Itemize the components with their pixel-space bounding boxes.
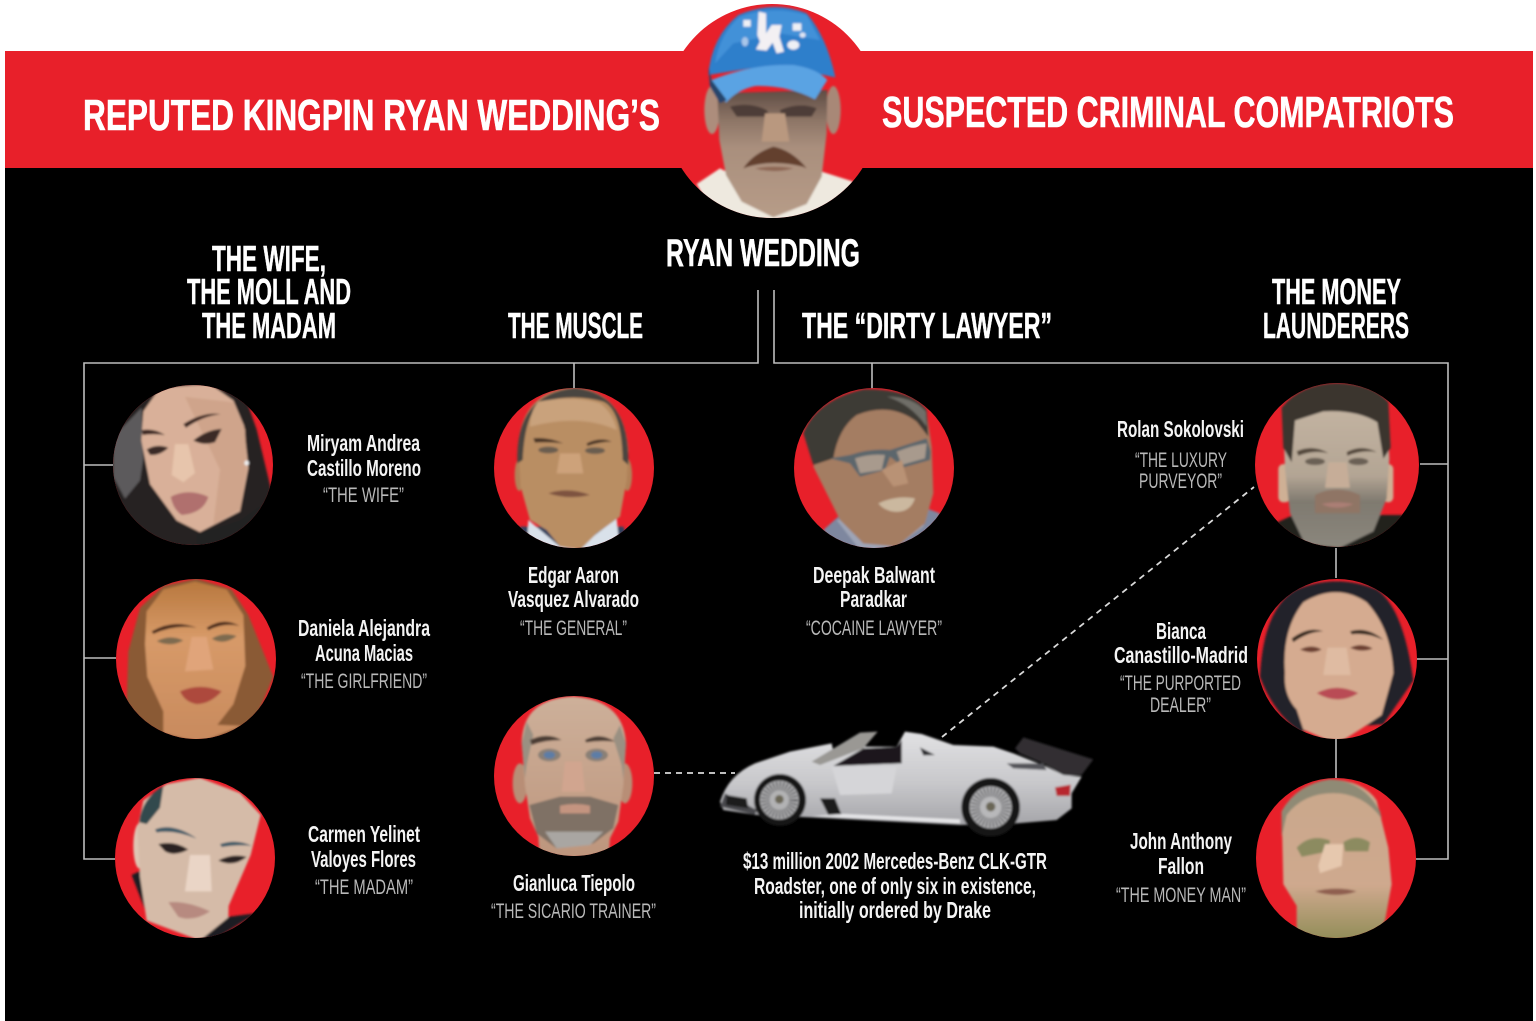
label: Bianca Canastillo-Madrid: Canastillo-Madrid <box>1114 642 1248 668</box>
caption: car description <box>743 848 1047 923</box>
label: John Anthony Fallon: “THE MONEY MAN” <box>1116 884 1246 907</box>
portrait: Deepak Balwant Paradkar <box>794 388 954 553</box>
caption: car description: Roadster, one of only six in existence, <box>754 873 1036 899</box>
label: Edgar Aaron Vasquez Alvarado <box>508 562 639 640</box>
label: Bianca Canastillo-Madrid: DEALER” <box>1150 694 1211 717</box>
label: Deepak Balwant Paradkar: “COCAINE LAWYER” <box>806 617 942 640</box>
label: Miryam Andrea Castillo Moreno <box>307 430 421 507</box>
portrait: Ryan Wedding <box>697 7 853 227</box>
heading: the wife, the moll and the madam: THE WIFE, <box>212 238 326 279</box>
dashed connector: Gianluca Tiepolo to car <box>654 772 735 774</box>
label: Rolan Sokolovski: “THE LUXURY <box>1135 449 1227 472</box>
label: Rolan Sokolovski: Rolan Sokolovski <box>1117 416 1244 442</box>
label: Rolan Sokolovski: PURVEYOR” <box>1139 470 1222 493</box>
portrait: Edgar Aaron Vasquez Alvarado <box>494 387 654 560</box>
label: Carmen Yelinet Valoyes Flores: “THE MADAM” <box>315 876 413 899</box>
portrait: Gianluca Tiepolo <box>494 696 654 862</box>
heading: the wife, the moll and the madam <box>187 238 351 346</box>
label: John Anthony Fallon: John Anthony <box>1130 828 1232 854</box>
portrait: Miryam Andrea Castillo Moreno <box>113 385 273 545</box>
heading: the money launderers: THE MONEY <box>1272 271 1401 312</box>
label: Rolan Sokolovski <box>1117 416 1244 493</box>
connector lines <box>84 290 1448 859</box>
label: Edgar Aaron Vasquez Alvarado: Vasquez Alvarado <box>508 586 639 612</box>
label: Bianca Canastillo-Madrid <box>1114 618 1248 717</box>
label: Daniela Alejandra Acuna Macias: Daniela Alejandra <box>298 615 430 641</box>
portrait: John Anthony Fallon <box>1256 778 1416 942</box>
label: Daniela Alejandra Acuna Macias: “THE GIRLFRIEND” <box>301 670 427 693</box>
label: Carmen Yelinet Valoyes Flores: Valoyes Flores <box>311 846 416 872</box>
heading: the money launderers <box>1263 271 1409 346</box>
caption: car description: $13 million 2002 Mercedes-Benz CLK-GTR <box>743 848 1047 874</box>
label: John Anthony Fallon: Fallon <box>1158 853 1204 879</box>
heading: Ryan Wedding: RYAN WEDDING <box>666 232 860 275</box>
heading: the dirty lawyer: THE “DIRTY LAWYER” <box>802 305 1052 346</box>
label: Miryam Andrea Castillo Moreno: “THE WIFE” <box>323 484 404 507</box>
header banner <box>5 4 1533 218</box>
portrait: Daniela Alejandra Acuna Macias <box>116 579 276 742</box>
heading: the wife, the moll and the madam: THE MADAM <box>202 305 336 346</box>
label: Deepak Balwant Paradkar <box>806 562 942 640</box>
dashed connector: car to Rolan Sokolovski <box>942 487 1254 737</box>
label: Edgar Aaron Vasquez Alvarado: Edgar Aaron <box>528 562 619 588</box>
label: Miryam Andrea Castillo Moreno: Miryam Andrea <box>307 430 420 456</box>
label: John Anthony Fallon <box>1116 828 1246 907</box>
label: Daniela Alejandra Acuna Macias <box>298 615 430 693</box>
label: Miryam Andrea Castillo Moreno: Castillo Moreno <box>307 455 421 481</box>
heading: the muscle: THE MUSCLE <box>508 305 643 346</box>
portrait: Bianca Canastillo-Madrid <box>1257 579 1417 744</box>
label: Gianluca Tiepolo: Gianluca Tiepolo <box>513 870 635 896</box>
heading: left banner title: REPUTED KINGPIN RYAN WEDDING’S <box>83 91 660 140</box>
label: Gianluca Tiepolo: “THE SICARIO TRAINER” <box>491 900 656 923</box>
heading: the money launderers: LAUNDERERS <box>1263 305 1409 346</box>
label: Carmen Yelinet Valoyes Flores: Carmen Yelinet <box>308 821 420 847</box>
portrait: Carmen Yelinet Valoyes Flores <box>115 778 275 942</box>
portrait: Rolan Sokolovski <box>1255 383 1419 564</box>
panel: the wife, the moll and the madam <box>107 238 430 942</box>
heading: the wife, the moll and the madam: THE MOLL AND <box>187 271 351 312</box>
panel: the muscle <box>491 305 656 923</box>
panel: the money launderers <box>1114 271 1419 942</box>
label: Bianca Canastillo-Madrid: “THE PURPORTED <box>1120 672 1241 695</box>
label: Gianluca Tiepolo <box>491 870 656 923</box>
caption: car description: initially ordered by Drake <box>799 897 991 923</box>
label: Deepak Balwant Paradkar: Paradkar <box>840 586 907 612</box>
label: Deepak Balwant Paradkar: Deepak Balwant <box>813 562 935 588</box>
panel: the dirty lawyer <box>794 305 1052 640</box>
car: Mercedes-Benz CLK-GTR <box>720 732 1093 837</box>
label: Bianca Canastillo-Madrid: Bianca <box>1156 618 1206 644</box>
label: Edgar Aaron Vasquez Alvarado: “THE GENERAL” <box>520 617 627 640</box>
label: Carmen Yelinet Valoyes Flores <box>308 821 420 899</box>
label: Daniela Alejandra Acuna Macias: Acuna Macias <box>315 640 413 666</box>
